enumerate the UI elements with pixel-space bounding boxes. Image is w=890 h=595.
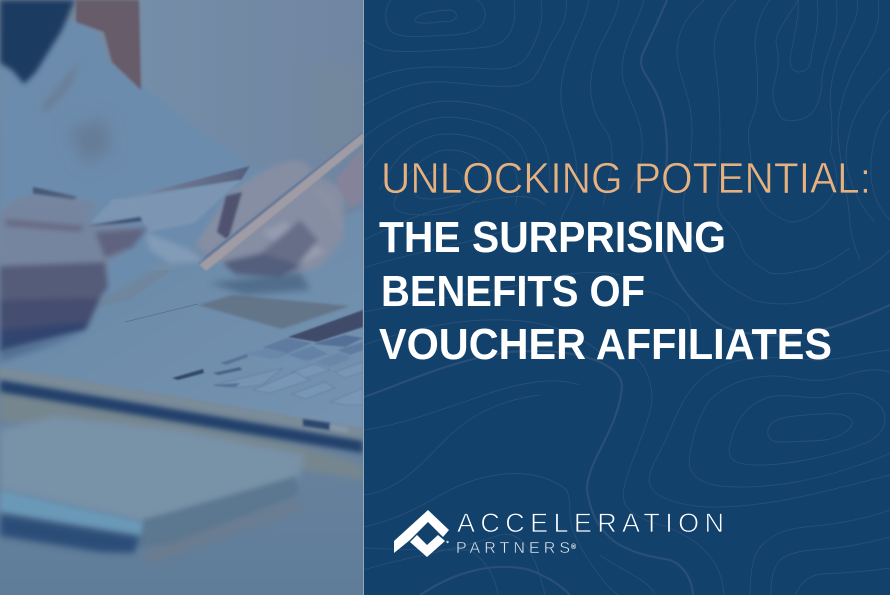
title line: the surprising: THE SURPRISING [379, 214, 726, 262]
shadow beneath notebook [148, 503, 297, 560]
logo wordmark: ACCELERATION [457, 508, 724, 538]
laptop dark lip [0, 380, 363, 453]
phone [197, 130, 363, 271]
sweater [0, 20, 268, 300]
tablet edge [0, 490, 143, 536]
right navy panel [363, 0, 890, 595]
title line: voucher affiliates: VOUCHER AFFILIATES [379, 321, 832, 369]
trackpad [198, 295, 350, 329]
title line: benefits of: BENEFITS OF [381, 268, 645, 316]
title [379, 155, 871, 369]
logo: Acceleration Partners [394, 508, 724, 557]
notebook top [0, 416, 305, 522]
registered mark: ® [571, 543, 577, 551]
laptop silver edge [0, 367, 363, 442]
laptop body [0, 210, 363, 430]
title line: unlocking potential: UNLOCKING POTENTIAL: [381, 155, 871, 203]
background photo: hands with card, phone and laptop [0, 0, 363, 595]
right hand [195, 160, 345, 278]
credit card [110, 166, 250, 202]
logo sub-wordmark: PARTNERS [456, 540, 570, 557]
panel divider [363, 0, 364, 595]
watch strap [217, 192, 242, 240]
hair [0, 0, 75, 84]
topographic contour lines [364, 0, 890, 595]
icon: logo mark [394, 510, 449, 557]
shadow under hands [210, 272, 310, 295]
left hand [0, 195, 147, 352]
notebook side [140, 476, 298, 548]
blurred wall [138, 0, 328, 270]
thick contour line accents [364, 0, 890, 595]
keyboard [172, 310, 363, 405]
desk below laptop warm strip [0, 393, 362, 478]
